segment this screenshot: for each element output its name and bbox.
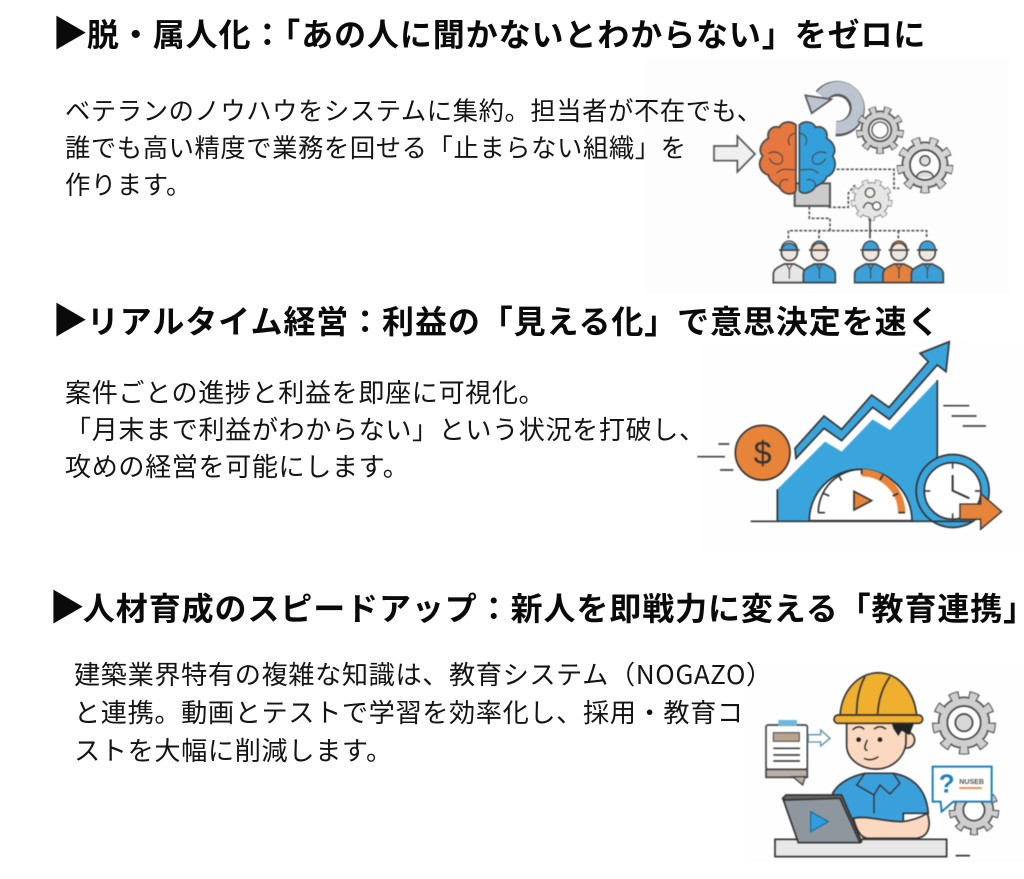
icon: device under brain	[795, 183, 830, 206]
icon: faint gear with people	[853, 181, 890, 219]
text block 1: 誰でも高い精度で業務を回せる「止まらない組織」を	[65, 129, 687, 165]
text block 3: 建築業界特有の複雑な知識は、教育システム（NOGAZO）	[74, 654, 773, 692]
panel background: illustration 2	[700, 340, 1024, 552]
callout: speech bubble: ?	[939, 769, 955, 799]
worker: arm	[853, 813, 929, 838]
icon: orange arrow	[960, 493, 1002, 529]
icon: clock	[915, 454, 990, 528]
text block 3	[74, 654, 773, 768]
team of workers	[773, 241, 943, 283]
worker: collar	[857, 773, 900, 813]
icon: coin	[735, 425, 790, 480]
text block 1: 作ります。	[65, 166, 192, 202]
text block 1	[65, 92, 763, 202]
text block 2: 攻めの経営を可能にします。	[65, 446, 409, 484]
illustration: brain knowledge network	[714, 88, 950, 283]
text block 1: ベテランのノウハウをシステムに集約。担当者が不在でも、	[65, 92, 763, 128]
icon: gauge	[809, 468, 912, 521]
text block 2: 案件ごとの進捗と利益を即座に可視化。	[65, 372, 545, 410]
text block 3: と連携。動画とテストで学習を効率化し、採用・教育コ	[74, 692, 744, 730]
worker: helmet	[834, 673, 923, 723]
callout: speech bubble: NUSEB	[959, 779, 984, 786]
worker: torso	[833, 773, 928, 840]
icon: gear small	[952, 788, 996, 832]
area chart	[777, 380, 937, 521]
speed lines	[697, 406, 986, 470]
text block 2: 「月末まで利益がわからない」という状況を打破し、	[65, 409, 706, 447]
icon: right brain	[799, 122, 835, 193]
icon: coin: $	[754, 435, 772, 471]
rising arrow	[795, 342, 949, 458]
heading 1: ▶脱・属人化：「あの人に聞かないとわからない」をゼロに	[52, 5, 926, 57]
brain grooves	[768, 133, 827, 188]
org chart connectors	[788, 169, 927, 238]
heading 3: ▶人材育成のスピードアップ：新人を即戦力に変える「教育連携」	[49, 579, 1024, 631]
text block 3: ストを大幅に削減します。	[74, 730, 393, 768]
illustration: worker studying on laptop	[766, 673, 996, 857]
callout: speech bubble	[933, 767, 992, 812]
panel background: illustration 3	[745, 662, 1024, 862]
icon: laptop	[783, 795, 862, 843]
icon: left brain	[760, 122, 796, 194]
baseline	[751, 519, 973, 524]
panel background: illustration 1	[645, 58, 1010, 293]
desk	[775, 839, 947, 857]
heading 2: ▶リアルタイム経営：利益の「見える化」で意思決定を速く	[52, 292, 940, 344]
worker: head	[847, 720, 915, 769]
text block 2	[65, 372, 706, 484]
icon: gear large	[936, 695, 992, 751]
icon: gear with person	[900, 140, 950, 190]
icon: cycle arrow	[805, 88, 858, 129]
icon: clipboard	[766, 720, 830, 785]
icon: input arrow	[714, 136, 755, 172]
icon: gear	[859, 109, 901, 151]
illustration: realtime profit chart	[697, 342, 1002, 529]
